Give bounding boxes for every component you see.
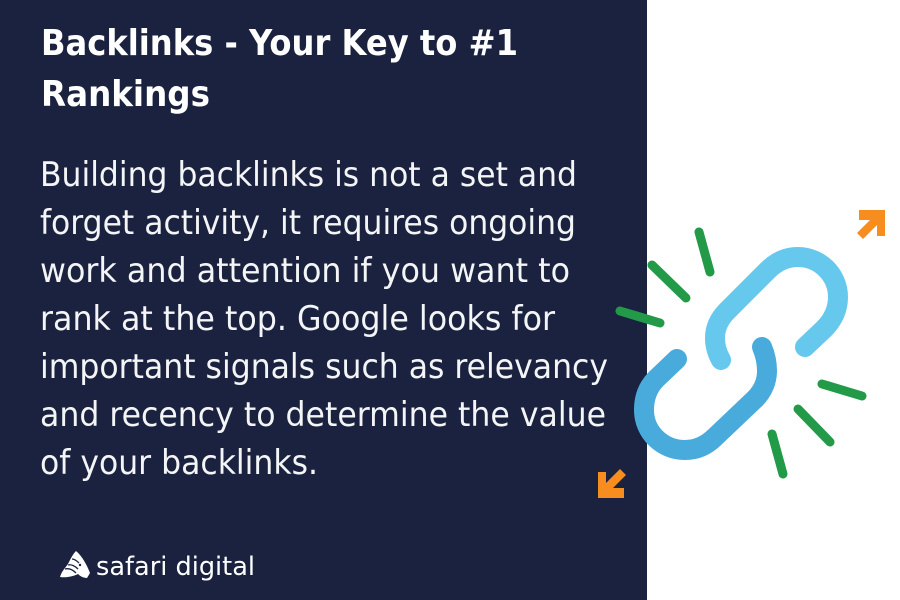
title: Rankings (41, 74, 210, 115)
body text block: rank at the top. Google looks for (40, 299, 555, 339)
body text block: important signals such as relevancy (40, 347, 608, 387)
icon: zebra head (60, 551, 90, 578)
logo: safari digital (60, 551, 255, 582)
body text block: of your backlinks. (40, 443, 318, 483)
lower blue link (644, 347, 767, 450)
logo wordmark: safari digital (96, 552, 255, 582)
arrow: orange up right (857, 210, 885, 239)
icon: broken chain link (644, 257, 838, 450)
arrow: orange down left (598, 469, 626, 498)
body text block: Building backlinks is not a set and (40, 155, 577, 195)
body text block: work and attention if you want to (40, 251, 570, 291)
icon: green spark lines upper left (620, 232, 710, 323)
body text block: forget activity, it requires ongoing (40, 203, 576, 243)
icon: green spark lines lower right (772, 384, 862, 474)
body text block: and recency to determine the value (40, 395, 606, 435)
title: Backlinks - Your Key to #1 (41, 23, 518, 64)
panel: navy text background (0, 0, 647, 600)
upper light blue link (715, 257, 838, 360)
title (41, 23, 518, 115)
body text block (40, 155, 608, 483)
